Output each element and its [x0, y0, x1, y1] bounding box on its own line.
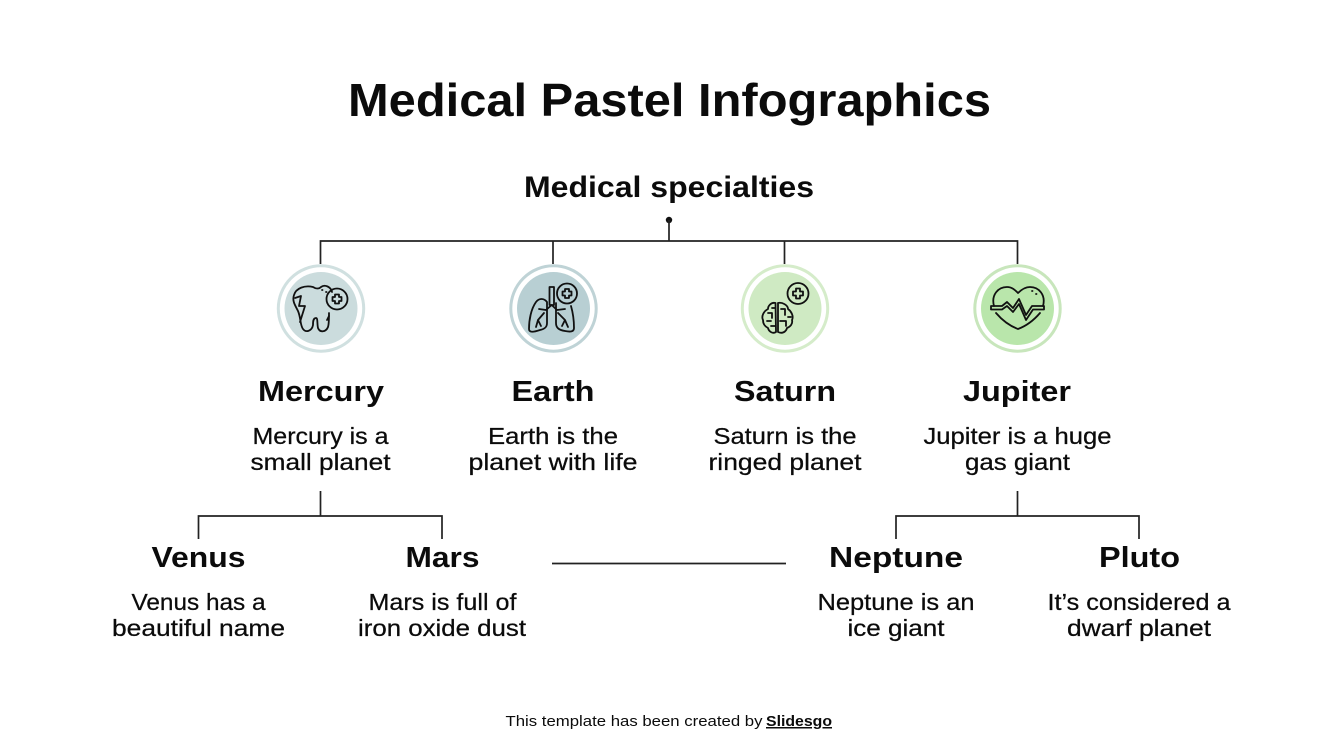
text: Neptune: Neptune	[829, 542, 963, 574]
connector: Jupiter branch	[896, 491, 1139, 539]
text: Saturn: Saturn	[734, 376, 836, 408]
icon: brain	[742, 266, 828, 351]
text: Mars: Mars	[406, 542, 480, 574]
text: Jupiter: Jupiter is a huge	[924, 423, 1112, 449]
footer credit: This template has been created by	[506, 713, 763, 730]
icon: tooth	[278, 266, 364, 351]
text: Neptune: ice giant	[848, 615, 945, 641]
text: Mars	[358, 542, 527, 641]
text: Mars: iron oxide dust	[358, 615, 527, 641]
text: Earth	[468, 376, 638, 475]
subtitle: medical specialties: Medical specialties	[524, 171, 814, 204]
text: Earth: Earth is the	[488, 423, 618, 449]
text: Venus: Venus	[152, 542, 246, 574]
connector: top tree	[320, 217, 1018, 264]
text: Earth: Earth	[512, 376, 594, 408]
connector: Mercury branch	[198, 491, 442, 539]
text: Venus	[112, 542, 285, 641]
text: Neptune	[818, 542, 974, 641]
text: Saturn	[708, 376, 862, 475]
connector: Mars to Neptune	[552, 562, 786, 564]
text: Jupiter	[924, 376, 1112, 475]
text: Jupiter: gas giant	[965, 449, 1071, 475]
text: Earth: planet with life	[468, 449, 638, 475]
text: Mercury: small planet	[250, 449, 391, 475]
text: Pluto: Pluto	[1099, 542, 1180, 574]
footer credit: Slidesgo	[766, 713, 832, 730]
text: Venus: beautiful name	[112, 615, 285, 641]
icon: lungs	[511, 266, 596, 351]
text: Mercury	[250, 376, 391, 475]
text: Saturn: Saturn is the	[714, 423, 856, 449]
text: Mercury: Mercury	[258, 376, 384, 408]
text: Pluto	[1048, 542, 1231, 641]
text: Jupiter: Jupiter	[963, 376, 1071, 408]
text: Pluto: dwarf planet	[1067, 615, 1212, 641]
text: Pluto: It’s considered a	[1048, 589, 1231, 615]
text: Mercury: Mercury is a	[252, 423, 389, 449]
icon: heart with pulse	[975, 266, 1060, 351]
text: Saturn: ringed planet	[708, 449, 862, 475]
text: Venus: Venus has a	[132, 589, 266, 615]
text: Neptune: Neptune is an	[818, 589, 974, 615]
title: Medical Pastel Infographics	[348, 74, 991, 126]
text: Mars: Mars is full of	[368, 589, 517, 615]
